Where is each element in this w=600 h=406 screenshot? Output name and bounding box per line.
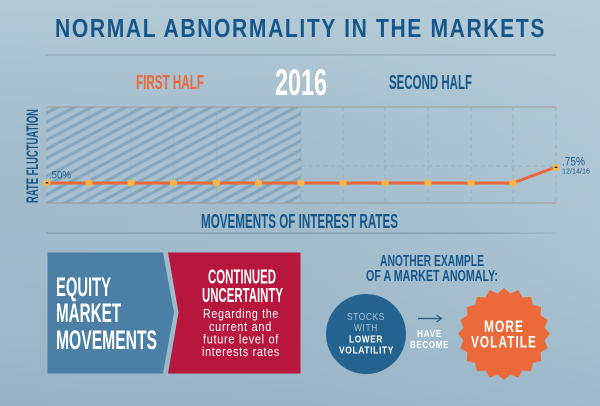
circle: stocks with lower volatility bbox=[326, 294, 406, 374]
circle: stocks with lower volatility: STOCKS bbox=[347, 311, 385, 323]
panel: continued uncertainty: UNCERTAINTY bbox=[202, 285, 283, 307]
line chart: interest rate bbox=[43, 106, 560, 204]
heading: year 2016: 2016 bbox=[275, 62, 327, 103]
panel: equity market movements: MARKET bbox=[56, 298, 121, 328]
title divider bbox=[45, 54, 556, 56]
panel: equity market movements: MOVEMENTS bbox=[56, 325, 157, 355]
rate line bbox=[47, 167, 556, 183]
starburst: more volatile: VOLATILE bbox=[471, 334, 537, 352]
panel: equity market movements bbox=[48, 252, 174, 374]
chart frame lines bbox=[46, 106, 556, 204]
heading: another example: OF A MARKET ANOMALY: bbox=[366, 268, 498, 285]
starburst: more volatile: MORE bbox=[484, 318, 524, 336]
circle: stocks with lower volatility: WITH bbox=[354, 322, 378, 334]
circle: stocks with lower volatility: VOLATILITY bbox=[339, 344, 394, 356]
axis divider bbox=[46, 232, 556, 234]
y axis label: RATE FLUCTUATION bbox=[23, 109, 42, 203]
circle: stocks with lower volatility: LOWER bbox=[349, 334, 383, 346]
text: have become bbox=[410, 329, 449, 351]
heading: another example: ANOTHER EXAMPLE bbox=[380, 253, 484, 270]
text: have become: BECOME bbox=[410, 340, 449, 351]
text: have become: HAVE bbox=[417, 329, 442, 340]
end value label: .75% bbox=[562, 156, 585, 168]
end value label bbox=[562, 156, 590, 176]
heading: another example bbox=[366, 253, 498, 285]
first half hatched area bbox=[46, 107, 301, 203]
panel: equity market movements: EQUITY bbox=[56, 272, 111, 302]
arrow bbox=[418, 315, 442, 322]
x axis label: MOVEMENTS OF INTEREST RATES bbox=[201, 211, 398, 233]
start value label: .50% bbox=[49, 170, 71, 182]
end value label: 12/14/16 bbox=[562, 168, 590, 176]
panel: continued uncertainty: interests rates bbox=[202, 345, 280, 359]
panel: continued uncertainty: current and bbox=[209, 320, 272, 334]
panel: continued uncertainty bbox=[168, 252, 300, 374]
grid bbox=[89, 107, 556, 203]
starburst: more volatile bbox=[458, 288, 550, 380]
panel: continued uncertainty: CONTINUED bbox=[208, 266, 276, 288]
panel: continued uncertainty: future level of bbox=[203, 332, 279, 346]
data points bbox=[43, 164, 560, 187]
heading: second half: SECOND HALF bbox=[389, 71, 472, 94]
heading: first half: FIRST HALF bbox=[136, 71, 204, 94]
end point markers bbox=[46, 166, 558, 184]
panel: continued uncertainty: Regarding the bbox=[203, 307, 279, 321]
